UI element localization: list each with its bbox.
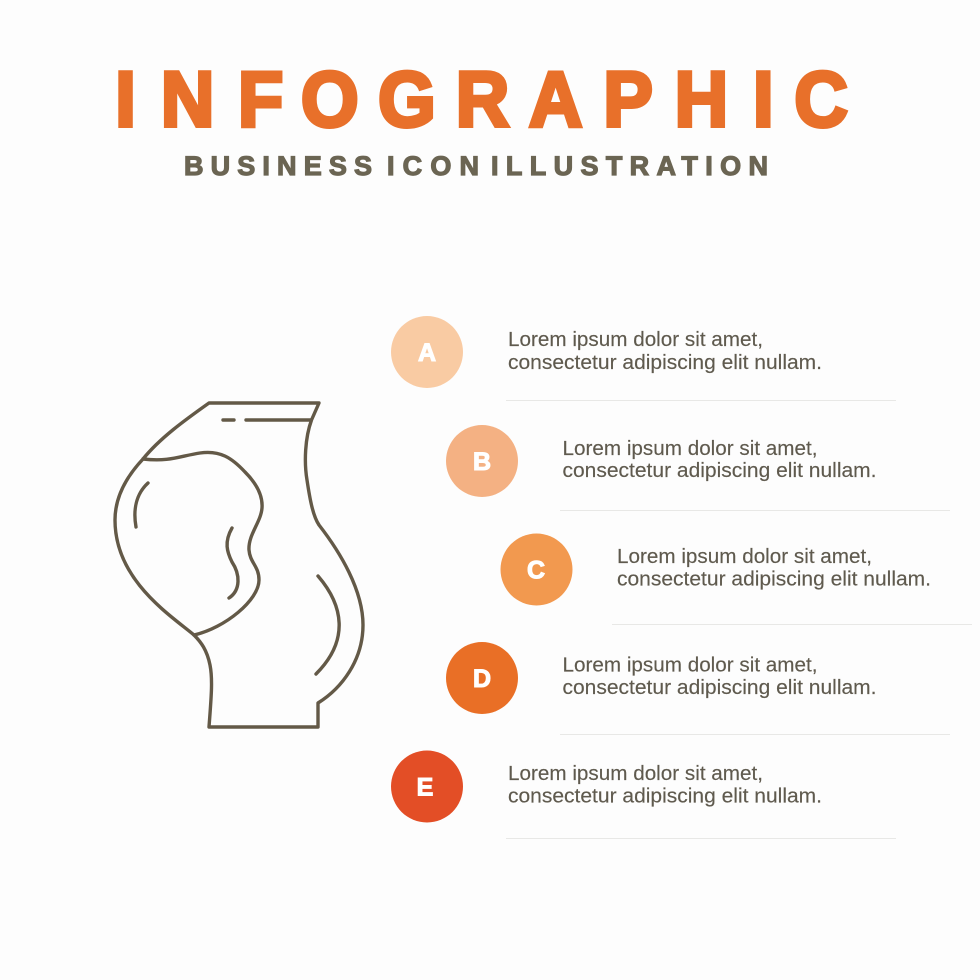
step E — [391, 750, 896, 839]
step C: Lorem ipsum dolor sit amet, — [617, 546, 872, 568]
step A — [391, 316, 896, 401]
step B: B — [473, 448, 491, 476]
subtitle: ILLUSTRATION — [491, 151, 768, 181]
step E: E — [417, 774, 433, 802]
step A: A — [418, 339, 436, 367]
step B: Lorem ipsum dolor sit amet, — [562, 438, 818, 460]
step D: D — [473, 665, 491, 693]
step E: Lorem ipsum dolor sit amet, — [508, 763, 763, 785]
step E: consectetur adipiscing elit nullam. — [508, 786, 822, 808]
step D: consectetur adipiscing elit nullam. — [562, 677, 876, 699]
subtitle: BUSINESS — [184, 151, 372, 181]
icon: pregnant belly — [115, 403, 363, 727]
step C: consectetur adipiscing elit nullam. — [617, 568, 931, 590]
step D — [446, 642, 950, 735]
step D: Lorem ipsum dolor sit amet, — [562, 654, 818, 676]
step B: consectetur adipiscing elit nullam. — [562, 460, 876, 482]
step A: Lorem ipsum dolor sit amet, — [508, 329, 763, 351]
subtitle — [184, 151, 768, 181]
step A: consectetur adipiscing elit nullam. — [508, 352, 822, 374]
title: INFOGRAPHIC — [115, 56, 848, 143]
subtitle: ICON — [387, 151, 479, 181]
step B — [446, 425, 950, 511]
step C: C — [527, 556, 545, 584]
step C — [500, 534, 972, 625]
